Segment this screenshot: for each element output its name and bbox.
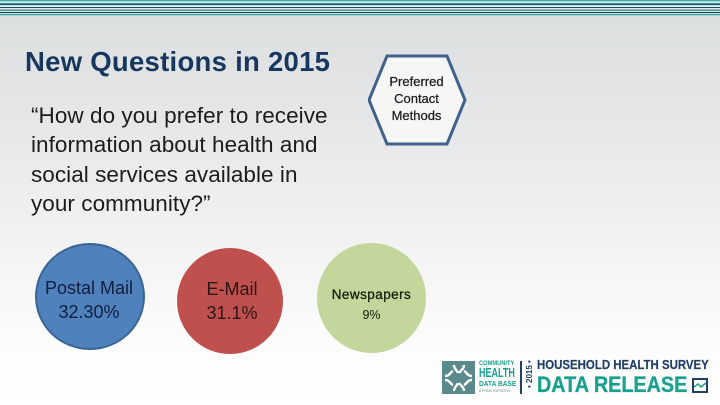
postal mail label: Postal Mail bbox=[45, 278, 133, 298]
data release heading: DATA RELEASE bbox=[537, 372, 687, 397]
decorative header stripes bbox=[0, 0, 720, 16]
hexagon: preferred contact methods: Methods bbox=[392, 108, 441, 123]
question text bbox=[31, 103, 328, 216]
icon: chart box bbox=[692, 378, 708, 393]
logo wordmark: COMMUNITY bbox=[479, 360, 514, 367]
postal mail label bbox=[45, 278, 133, 322]
question text: “How do you prefer to receive bbox=[31, 103, 328, 128]
logo: community health data base bbox=[442, 358, 709, 397]
hexagon: preferred contact methods bbox=[368, 54, 467, 146]
postal mail label: 32.30% bbox=[58, 302, 120, 322]
logo divider bbox=[520, 361, 522, 394]
logo wordmark: A PHMC INITIATIVE bbox=[479, 389, 511, 393]
logo wordmark: HEALTH bbox=[479, 366, 515, 380]
circle: newspapers bbox=[317, 243, 426, 353]
e-mail label bbox=[206, 279, 258, 323]
question text: your community?” bbox=[31, 191, 211, 216]
newspapers label: 9% bbox=[362, 308, 381, 322]
hexagon: preferred contact methods: Preferred bbox=[389, 74, 444, 89]
e-mail label: E-Mail bbox=[206, 279, 258, 299]
newspapers label: Newspapers bbox=[332, 287, 411, 302]
newspapers label bbox=[332, 287, 411, 322]
question text: information about health and bbox=[31, 132, 318, 157]
logo wordmark bbox=[479, 360, 516, 393]
hexagon: preferred contact methods: Contact bbox=[394, 91, 439, 106]
title: New Questions in 2015 bbox=[25, 46, 330, 77]
circle: e-mail bbox=[177, 248, 283, 354]
logo year: • 2015 • bbox=[525, 360, 534, 388]
circle: postal mail bbox=[35, 243, 145, 350]
survey heading: HOUSEHOLD HEALTH SURVEY bbox=[537, 358, 709, 372]
question text: social services available in bbox=[31, 162, 298, 187]
e-mail label: 31.1% bbox=[206, 303, 258, 323]
logo mark bbox=[442, 361, 475, 394]
logo wordmark: DATA BASE bbox=[479, 379, 516, 388]
